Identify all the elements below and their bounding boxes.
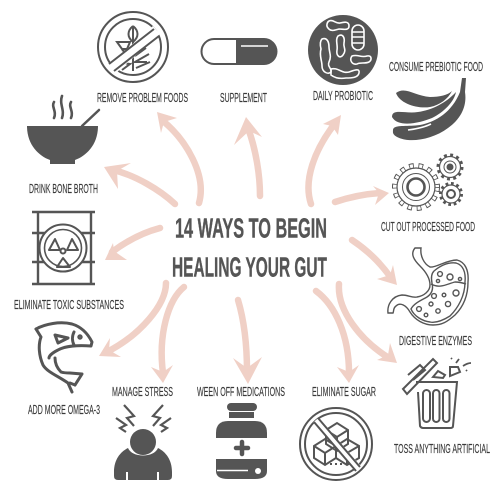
label: add more omega-3: ADD MORE OMEGA-3 [28,403,100,417]
label: supplement: SUPPLEMENT [220,91,267,105]
label: daily probiotic: DAILY PROBIOTIC [313,89,373,103]
icon: toxic barrel [32,212,95,284]
icon: capsule [201,38,278,65]
label: remove problem foods: REMOVE PROBLEM FOODS [97,91,188,105]
title: 14 WAYS TO BEGIN [175,212,327,244]
icon: stomach [388,248,468,325]
arrows [99,112,397,384]
icon: stress person [114,405,172,480]
icon: bowl [27,96,99,164]
icon: no sugar [300,408,372,480]
icon: no wheat [98,12,168,82]
icon: fish [36,323,92,392]
title [172,212,327,282]
label: eliminate sugar: ELIMINATE SUGAR [312,385,376,399]
icon: gears [395,156,462,208]
label: drink bone broth: DRINK BONE BROTH [29,182,98,196]
icon: probiotic [308,15,378,85]
title: HEALING YOUR GUT [172,252,327,282]
icon: trash can [403,358,471,428]
label: manage stress: MANAGE STRESS [112,385,173,399]
label: eliminate toxic substances: ELIMINATE TOXIC SUBSTANCES [14,298,124,312]
icon: bananas [392,78,466,140]
label: ween off medications: WEEN OFF MEDICATIONS [197,385,285,399]
icon: medicine jar [216,403,267,479]
